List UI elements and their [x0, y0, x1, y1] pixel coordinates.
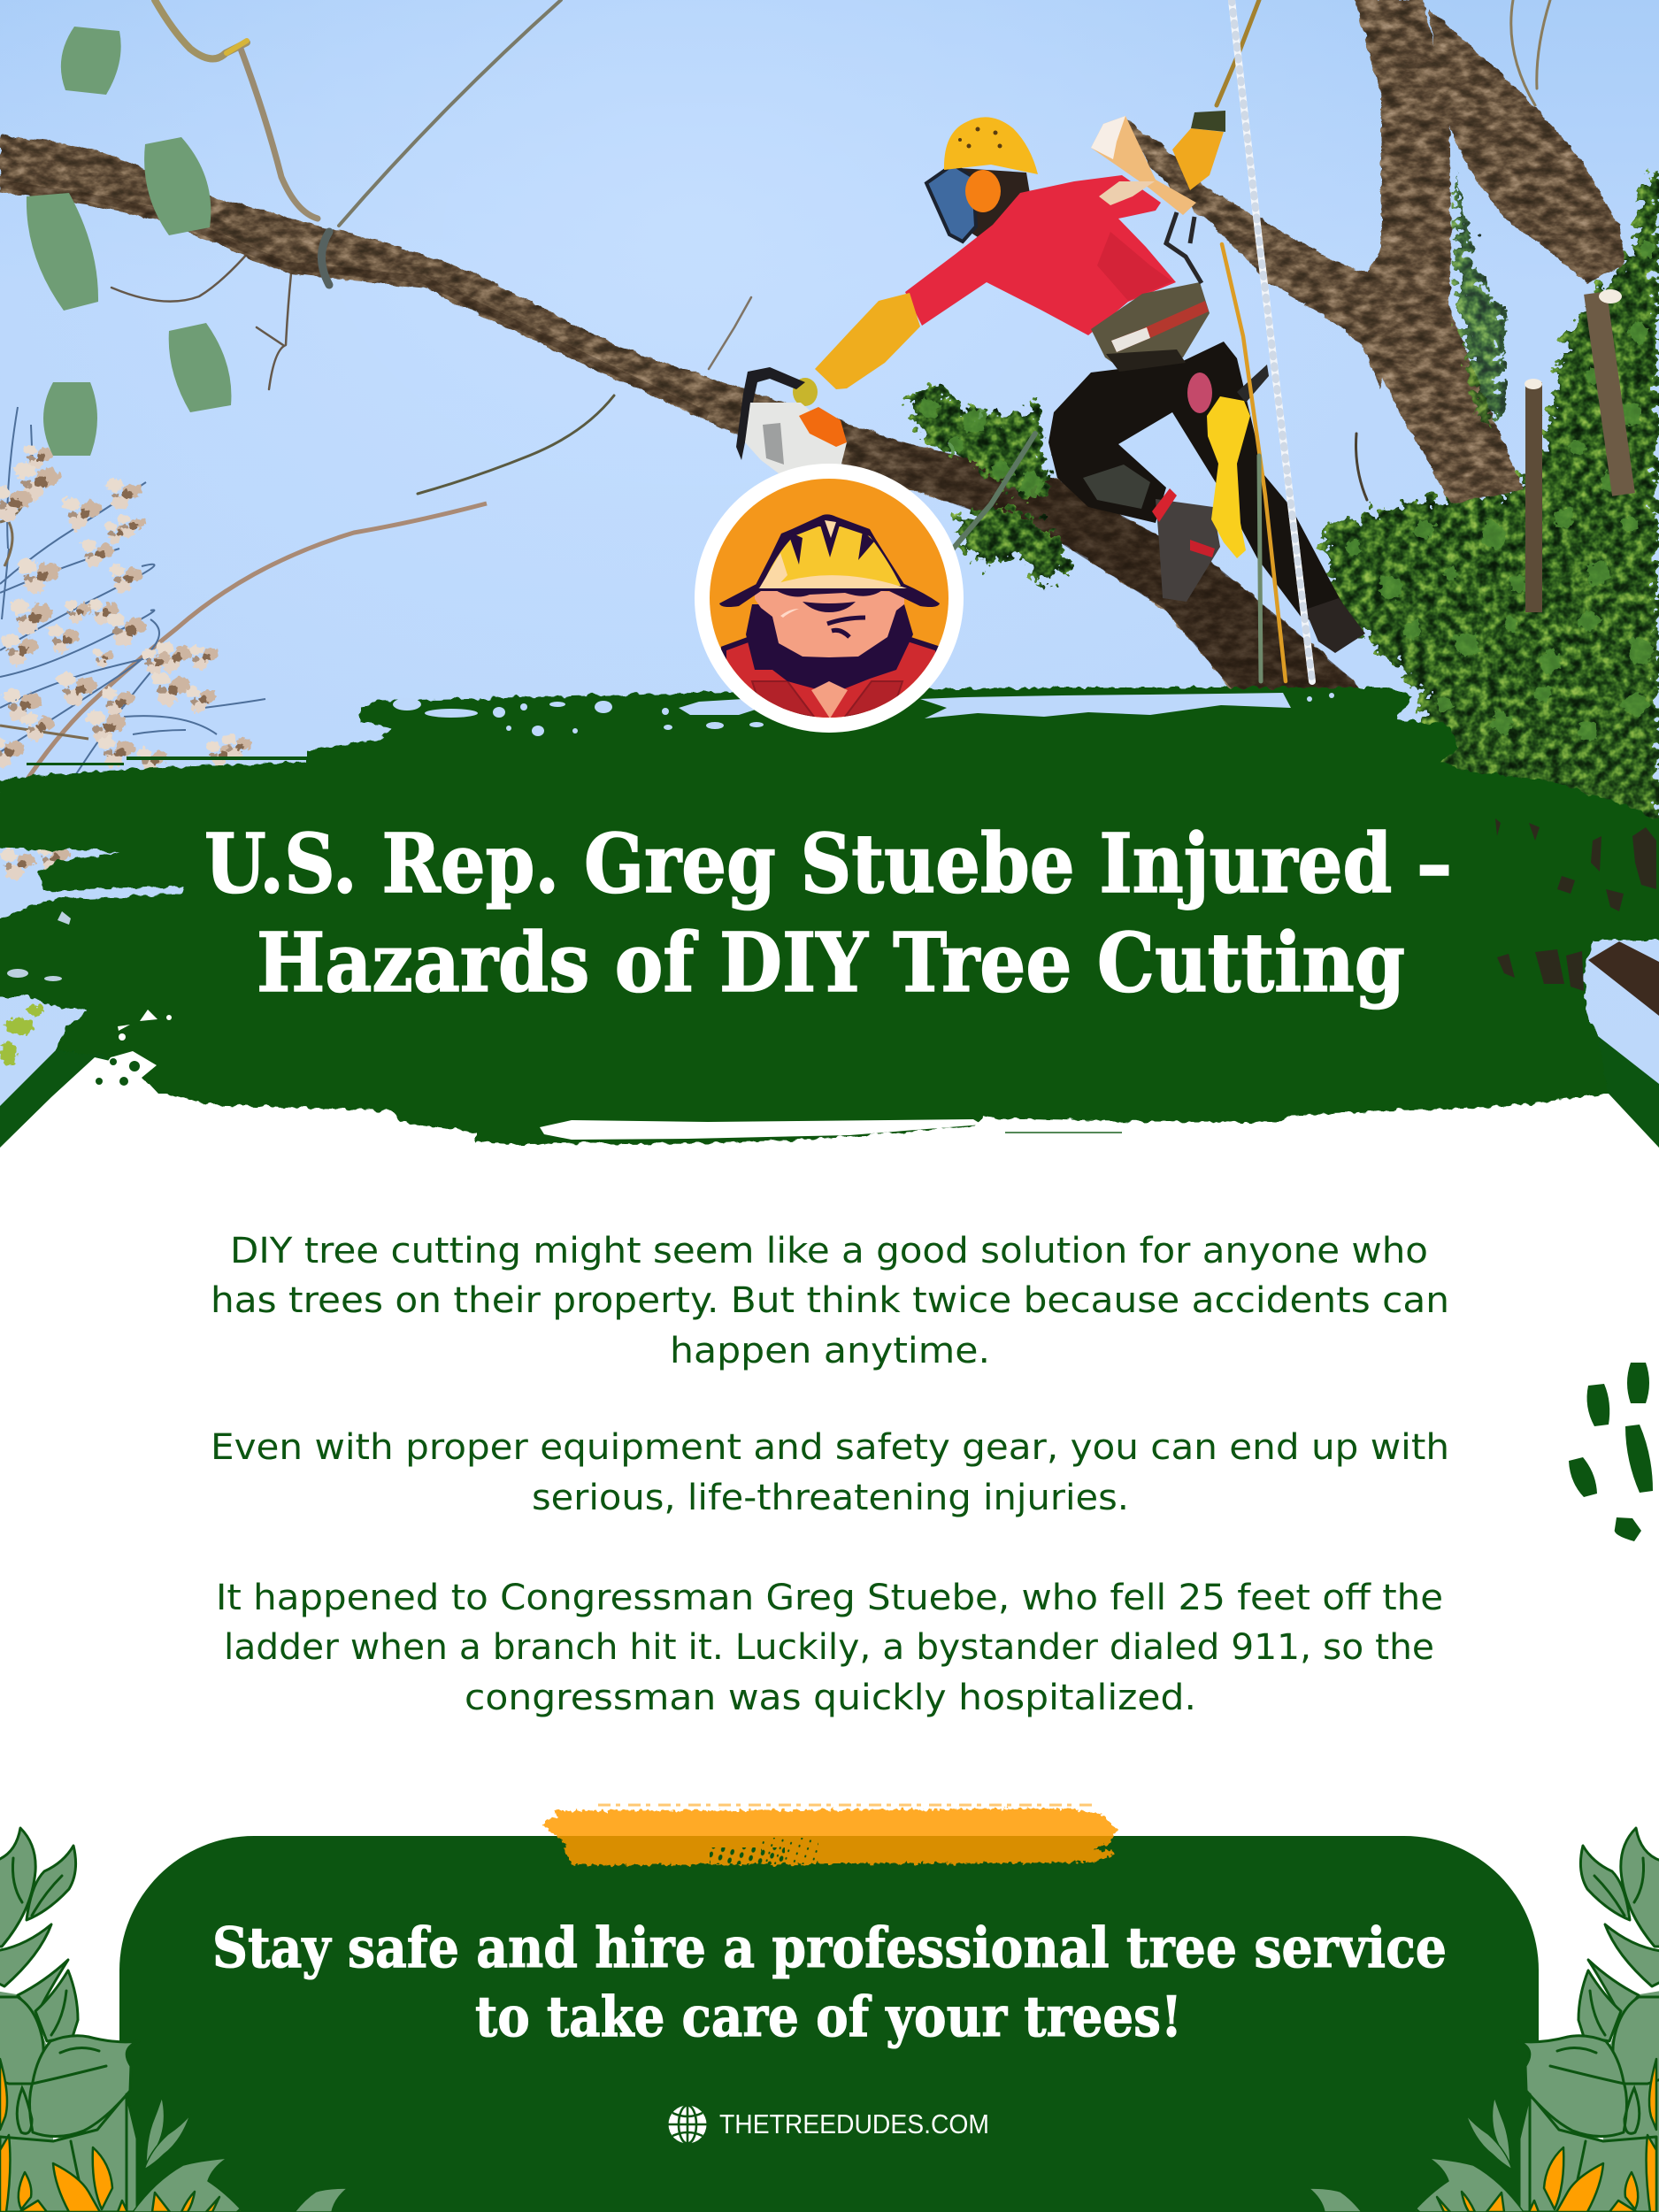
brush accent speckle: [710, 1838, 818, 1864]
orange brush accent: [542, 1809, 1117, 1865]
green brush-stroke banner: [0, 687, 1659, 1144]
cut log end: [1091, 116, 1196, 215]
shirt plaid: [752, 681, 902, 717]
foliage: bottom left corner: [0, 1828, 348, 2212]
shaded lower branch: [708, 380, 1367, 708]
title: [204, 816, 1452, 1010]
saw handle: [1237, 365, 1269, 403]
white stripe along banner bottom: [540, 1119, 982, 1140]
call-to-action panel: [119, 1836, 1539, 2212]
twigs and thin branches: [111, 0, 1550, 500]
title: Hazards of DIY Tree Cutting: [257, 915, 1405, 1010]
second paragraph: serious, life-threatening injuries.: [532, 1478, 1129, 1518]
badge background: [710, 479, 949, 718]
hard hat yellow: [763, 526, 901, 586]
carabiner straps: [1166, 212, 1202, 283]
red shirt: [905, 175, 1176, 335]
ivy sprigs beside trunk: [1455, 168, 1504, 425]
hat cream wedge: [759, 553, 787, 588]
lower-left greenery: [1, 1005, 44, 1065]
branch underside shadow: [0, 184, 708, 416]
decorative leaves at top left: [27, 27, 231, 456]
flecks at lower left of banner: [96, 1010, 172, 1097]
brush details: sky flecks and torn edges: [393, 693, 1334, 736]
trousers: [1048, 342, 1359, 634]
logo badge: lumberjack in hard hat: [695, 464, 964, 734]
upper branch and cut log: [1125, 118, 1389, 389]
left yellow sleeve: [815, 293, 920, 389]
badge ring: [695, 464, 964, 733]
hat ridges: [790, 526, 874, 565]
title: U.S. Rep. Greg Stuebe Injured –: [204, 816, 1452, 911]
yellow helmet: [944, 117, 1038, 174]
right yellow sleeve: [1172, 128, 1224, 190]
decorative footprints at right: [1569, 1363, 1653, 1541]
main trunk: [1345, 0, 1524, 503]
left glove: [793, 378, 818, 406]
shirt: [721, 637, 939, 718]
call-to-action heading: to take care of your trees!: [475, 1984, 1182, 2049]
back trunk: [1429, 10, 1624, 283]
torn flecks at right of banner: [1495, 818, 1656, 991]
beard: [746, 604, 913, 689]
hat band: [758, 575, 907, 588]
foliage: bottom right corner: [1309, 1828, 1659, 2212]
thin torn strip on top left of banner: [27, 757, 312, 765]
knee pad: [1083, 465, 1150, 509]
brush accent fringe: [598, 1803, 1092, 1807]
face shield: [926, 165, 976, 242]
main diagonal branch: [0, 135, 1367, 708]
ear defender: [965, 170, 1001, 212]
second paragraph: [211, 1427, 1449, 1518]
holes in splatter: [96, 1058, 140, 1086]
photo flecks at left of banner: [7, 911, 71, 981]
boots: [1152, 488, 1365, 653]
right dark glove: [1191, 111, 1225, 132]
cheek highlight: [780, 609, 799, 618]
arborist figure: [736, 111, 1365, 653]
blossom tree at left: [0, 407, 487, 952]
hero photo: arborist cutting a tree branch: [0, 0, 1659, 1150]
third paragraph: ladder when a branch hit it. Luckily, a bystander dialed 911, so the: [224, 1627, 1434, 1668]
climbing ropes: [322, 0, 1312, 681]
intro paragraph: DIY tree cutting might seem like a good solution for anyone who: [230, 1231, 1428, 1271]
call-to-action heading: [212, 1915, 1447, 2049]
bright ivy leaves: [913, 236, 1659, 748]
call-to-action heading: Stay safe and hire a professional tree service: [212, 1915, 1447, 1980]
third paragraph: It happened to Congressman Greg Stuebe, who fell 25 feet off the: [216, 1578, 1443, 1618]
branch at right behind banner: [1588, 941, 1659, 1016]
cut stubs: [1525, 289, 1635, 612]
sky: [0, 0, 1659, 1150]
yellow saw scabbard: [1207, 396, 1250, 558]
pink throw-bag: [1187, 373, 1212, 413]
neck and head: [960, 168, 1031, 237]
third paragraph: congressman was quickly hospitalized.: [465, 1678, 1196, 1718]
hard hat outline: [754, 514, 907, 588]
white page area: [0, 1057, 1659, 2212]
leaves on the branch: [905, 385, 1048, 495]
second paragraph: Even with proper equipment and safety gear, you can end up with: [211, 1427, 1449, 1468]
third paragraph: [216, 1578, 1443, 1718]
neck: [811, 681, 848, 718]
small bottom dash: [1005, 1132, 1122, 1133]
nose: [803, 602, 856, 612]
website address: THETREEDUDES.COM: [719, 2108, 989, 2139]
hat ridge highlight: [825, 520, 836, 538]
shaded leaves under the branch: [956, 504, 1075, 584]
intro paragraph: happen anytime.: [670, 1331, 990, 1371]
chainsaw: [736, 367, 847, 473]
tool belt: [1091, 282, 1210, 372]
intro paragraph: has trees on their property. But think twice because accidents can: [211, 1280, 1449, 1321]
hat brim: [719, 584, 940, 607]
face: [755, 586, 904, 657]
sunglasses shadow: [777, 591, 881, 596]
icon: globe: [668, 2105, 707, 2144]
intro paragraph: [211, 1231, 1449, 1371]
mouth: [827, 618, 865, 637]
roof-shaped green band behind the page: [0, 1018, 1659, 1159]
ivy-covered tree at right: [1323, 173, 1659, 885]
